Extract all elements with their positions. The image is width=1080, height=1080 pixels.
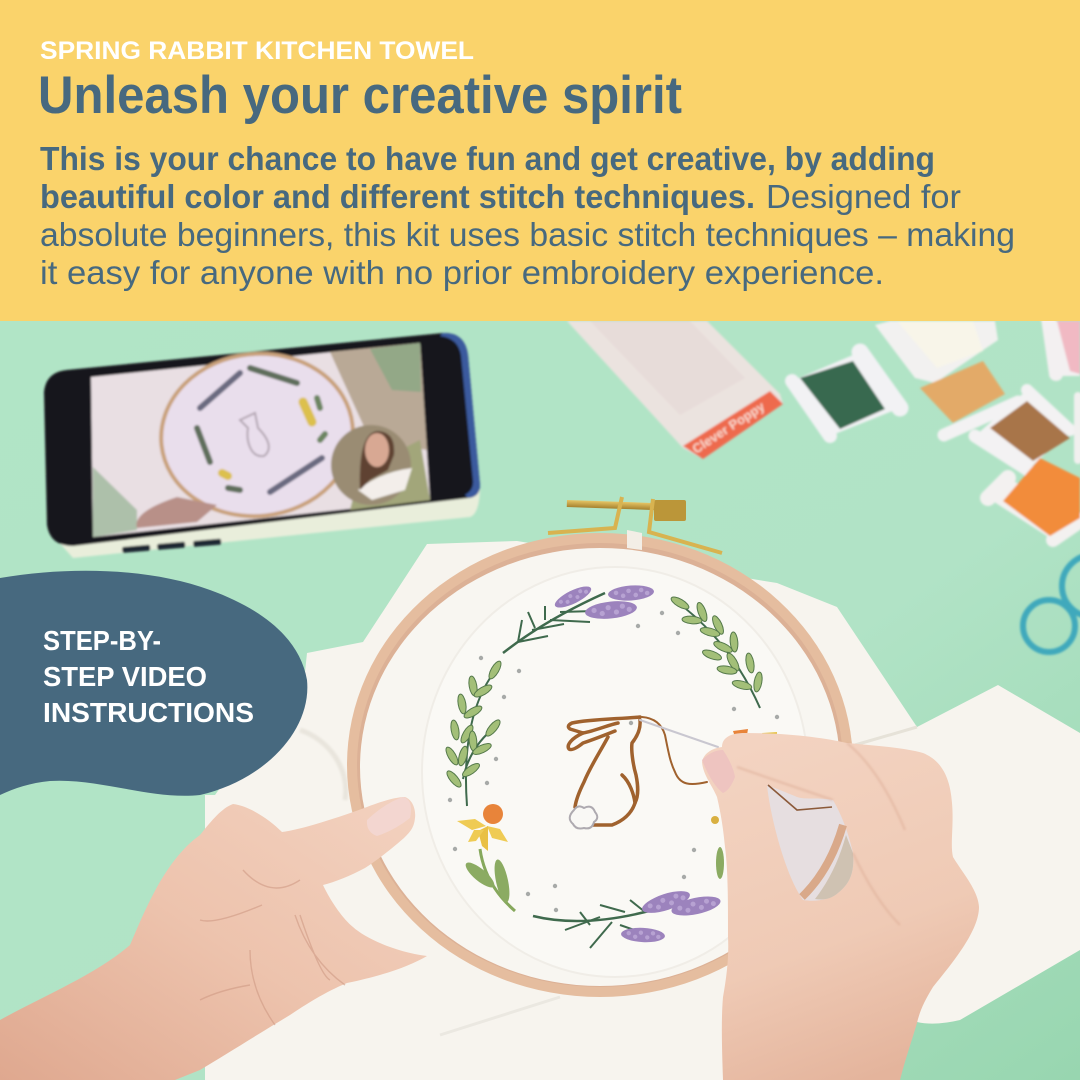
video: small rabbit (240, 413, 269, 456)
bobbin: brown (975, 390, 1070, 470)
bobbin: pink (1048, 318, 1080, 376)
daffodil (457, 804, 515, 911)
needle package (567, 321, 783, 459)
hoop ring (347, 533, 853, 997)
video: small hoop (153, 344, 361, 526)
smartphone (44, 333, 480, 558)
lavender top left (503, 582, 654, 653)
hoop screw hardware (548, 497, 722, 553)
white towel fabric (205, 541, 1080, 1080)
embroidery hoop (347, 497, 853, 997)
body text: it easy for anyone with no prior embroidery experience. (40, 254, 884, 291)
right fingernail (702, 750, 735, 793)
phone ports (122, 539, 221, 553)
hand gap showing hoop back (767, 785, 853, 901)
hoop fabric (360, 548, 840, 986)
left hand (0, 797, 427, 1080)
eyebrow heading: SPRING RABBIT KITCHEN TOWEL (40, 37, 474, 65)
body text: This is your chance to have fun and get creative, by adding (40, 140, 935, 177)
lavender bottom (533, 887, 722, 948)
rabbit outline stitch (568, 717, 718, 828)
bobbin: orange (988, 458, 1080, 540)
french knot dots (448, 611, 779, 912)
right hand (702, 733, 979, 1080)
body text: absolute beginners, this kit uses basic stitch techniques – making (40, 216, 1015, 253)
background: green tabletop (0, 321, 1080, 1080)
header panel (0, 0, 1080, 321)
rabbit loose thread (642, 717, 707, 784)
left thumbnail (367, 797, 411, 836)
leaf sprig top right (669, 595, 763, 708)
video: small wreath (197, 368, 325, 492)
body text (40, 140, 1015, 291)
bobbin: white (875, 321, 998, 383)
leaf sprig left (444, 659, 503, 806)
body text: beautiful color and different stitch techniques. (40, 178, 755, 215)
thread bobbins (792, 318, 1080, 540)
phone screen video (91, 343, 430, 537)
video: presenter inset (331, 425, 412, 505)
sewing needle (640, 720, 718, 747)
callout text (43, 625, 254, 728)
callout blob (0, 571, 307, 796)
video: presenter hand (136, 497, 217, 528)
scissors (1023, 555, 1080, 652)
callout text: STEP VIDEO (43, 661, 207, 692)
right flower fragments (711, 729, 777, 879)
bobbin: tan (920, 361, 1018, 435)
package label: Clever Poppy (689, 398, 768, 457)
callout text: STEP-BY- (43, 625, 161, 656)
bobbin: dark green (792, 352, 900, 436)
rabbit tail (570, 806, 597, 828)
title: Unleash your creative spirit (38, 66, 682, 125)
body text: Designed for (766, 178, 961, 215)
callout text: INSTRUCTIONS (43, 697, 254, 728)
towel: main body (205, 541, 1080, 1080)
wreath (444, 582, 779, 948)
phone case (48, 480, 480, 558)
